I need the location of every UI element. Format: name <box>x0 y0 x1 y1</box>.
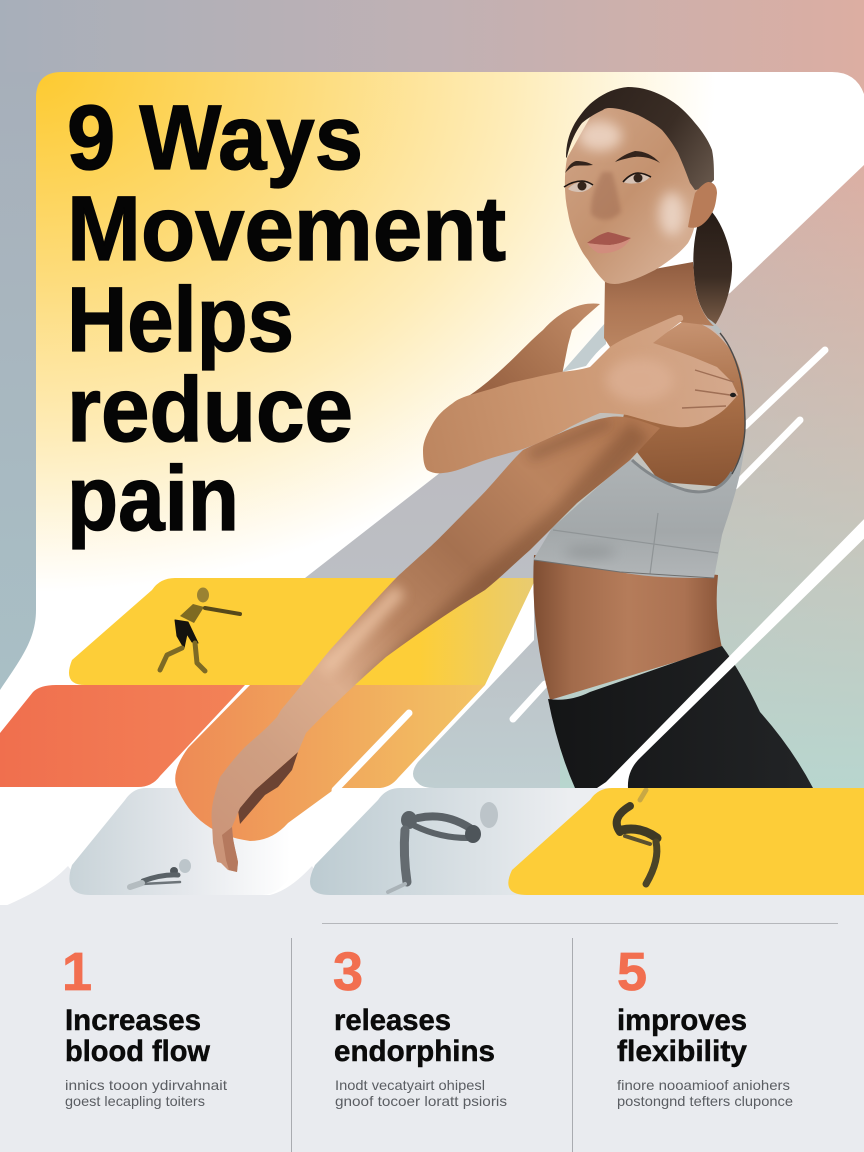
benefit 5: improves <box>617 1004 747 1037</box>
neck <box>604 262 714 350</box>
benefit 3 <box>333 942 507 1109</box>
benefit 5: finore nooamioof aniohers <box>617 1077 790 1093</box>
benefit 3: 3 <box>333 942 363 1002</box>
title: pain <box>67 448 239 550</box>
eyebrows <box>565 151 660 173</box>
benefit 5: 5 <box>617 942 647 1002</box>
left upper arm <box>450 304 600 407</box>
benefit 1: blood flow <box>65 1035 211 1068</box>
benefit 3: endorphins <box>334 1035 495 1068</box>
panel: bottom benefits panel <box>0 905 864 1152</box>
head <box>564 87 717 284</box>
title <box>67 87 506 550</box>
icon: forward bending figure <box>388 802 498 892</box>
ponytail <box>693 205 732 325</box>
torso <box>533 555 722 700</box>
benefit 1 <box>62 942 227 1109</box>
fingers shading <box>222 827 238 872</box>
ear <box>688 182 717 228</box>
benefit 3: releases <box>334 1004 451 1037</box>
icon: crouching figure <box>617 790 657 884</box>
white accent stripes behind figure <box>335 350 825 790</box>
leggings <box>548 646 813 788</box>
title: 9 Ways <box>67 87 363 189</box>
back and shoulder <box>620 320 745 487</box>
panel: red bar <box>0 685 245 787</box>
extended arm <box>211 417 660 872</box>
panel: grey bar with bent figure <box>310 788 640 895</box>
nose shadow <box>591 172 621 220</box>
eyes <box>564 173 651 192</box>
sports top <box>533 317 745 578</box>
panel: yellow exercise bar <box>69 578 536 685</box>
folded forearm and hand on shoulder <box>423 315 738 473</box>
panel: pale grey bar with lying figure <box>0 788 864 910</box>
title: reduce <box>67 359 353 461</box>
benefit 3: Inodt vecatyairt ohipesl <box>335 1077 485 1093</box>
figure: woman stretching <box>211 87 864 872</box>
shoulder strap <box>562 322 606 372</box>
lips <box>587 232 631 245</box>
icon: standing reach figure <box>160 588 240 671</box>
benefit 1: 1 <box>62 942 92 1002</box>
benefit 1: innics tooon ydirvahnait <box>65 1077 227 1093</box>
benefit 5 <box>617 942 793 1109</box>
benefit 1: goest lecapling toiters <box>65 1093 205 1109</box>
title: Helps <box>67 269 294 371</box>
benefit 1: Increases <box>65 1004 201 1037</box>
benefit 5: postongnd tefters cluponce <box>617 1093 793 1109</box>
long white stripe across leggings <box>597 513 864 788</box>
hand palm shadow <box>238 752 298 824</box>
forehead highlight <box>578 121 622 151</box>
benefit 5: flexibility <box>617 1035 747 1068</box>
panel: orange bar <box>175 685 485 841</box>
cheek highlight <box>659 192 685 236</box>
panel: yellow bar with crouching figure <box>508 788 864 895</box>
hair <box>566 87 714 190</box>
icon: lying figure <box>130 859 191 887</box>
title: Movement <box>67 178 506 280</box>
panel: white and yellow header panel <box>0 72 864 905</box>
benefit 3: gnoof tocoer loratt psioris <box>335 1093 507 1109</box>
